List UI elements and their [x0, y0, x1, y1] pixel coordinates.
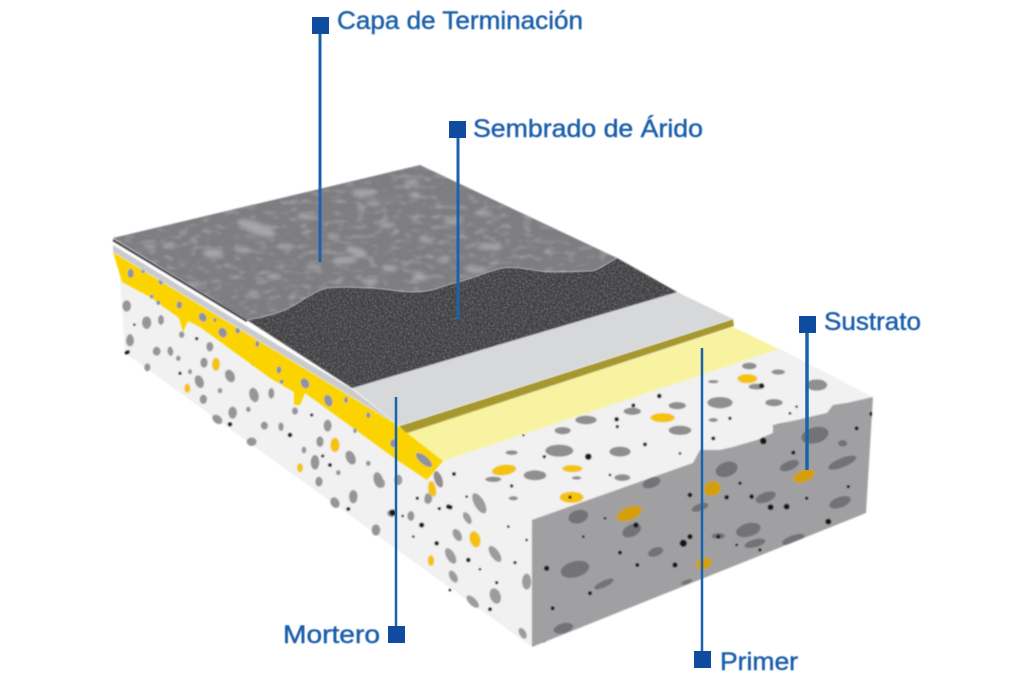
layer: primer yellow strip — [405, 327, 779, 461]
layer: mortar light grey — [352, 292, 733, 426]
concrete substrate: top and left side — [120, 278, 873, 647]
layer: yellow mortar side band — [113, 252, 443, 480]
concrete side aggregate upper left — [122, 300, 213, 356]
label: Mortero: Mortero — [283, 621, 380, 649]
label: Sembrado de Árido: Sembrado de Árido — [473, 114, 703, 143]
label: Sustrato — [799, 308, 921, 470]
label: Capa de Terminación: Capa de Terminación — [337, 7, 583, 35]
label: Primer — [694, 348, 798, 676]
label: Sembrado de Árido — [449, 114, 703, 319]
finish coat clouds — [119, 166, 608, 316]
concrete top aggregate — [427, 363, 827, 510]
concrete front face — [532, 397, 874, 647]
layer: olive primer edge — [399, 319, 734, 434]
label: Capa de Terminación — [312, 7, 583, 262]
label: Mortero — [283, 397, 405, 649]
concrete side aggregate right — [378, 475, 531, 640]
layer: dark aggregate seeding — [240, 255, 680, 390]
layer: top finish coat — [110, 160, 620, 325]
infographic: floor system layers — [112, 9, 921, 672]
label: Primer: Primer — [720, 648, 798, 676]
label: Sustrato: Sustrato — [824, 308, 921, 336]
finish coat mottling — [143, 180, 503, 296]
concrete side aggregate lower left — [125, 334, 435, 566]
layer: thin grey edge strip — [113, 245, 399, 426]
